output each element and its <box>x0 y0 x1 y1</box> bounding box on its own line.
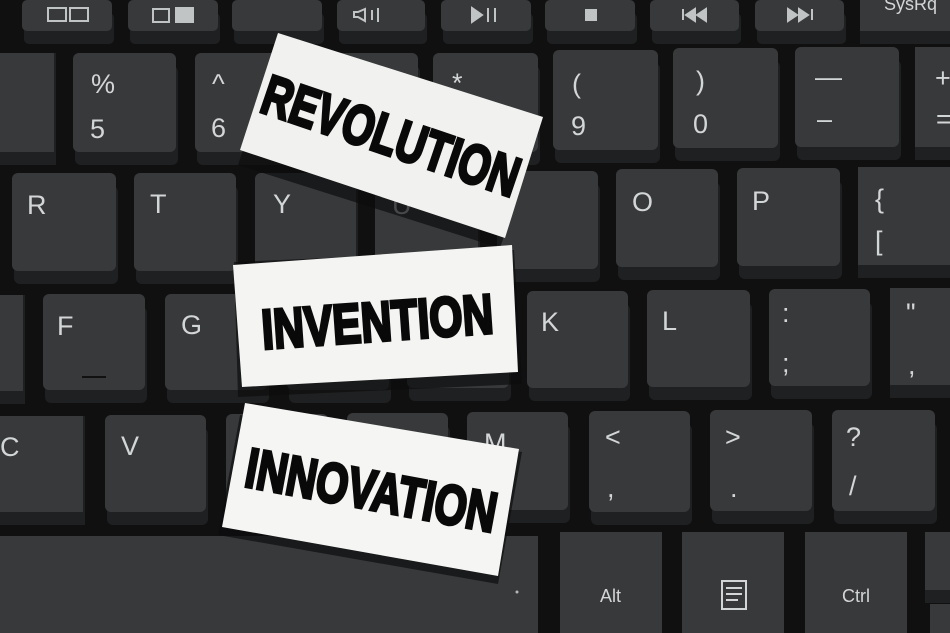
key legends: M <box>484 428 506 458</box>
key legends: 6 <box>211 113 226 143</box>
key legends: ; <box>782 348 790 378</box>
key legends: O <box>632 187 653 217</box>
key legends: < <box>605 422 621 452</box>
block: REVOLUTION <box>240 33 543 238</box>
key legends: { <box>875 184 884 214</box>
key legends: 5 <box>90 114 105 144</box>
key legends: L <box>662 306 677 336</box>
block: INNOVATION <box>222 403 519 576</box>
key legends: 9 <box>571 111 586 141</box>
key legends: F <box>57 311 74 341</box>
key legends: . <box>730 473 738 503</box>
key legends: T <box>150 189 166 219</box>
key legends: V <box>121 431 139 461</box>
block: INVENTION <box>233 245 518 387</box>
key legends: G <box>181 310 202 340</box>
key legends: ) <box>696 66 705 96</box>
key legends: ? <box>846 422 861 452</box>
key legends: — <box>815 62 842 92</box>
key legends: , <box>607 473 615 503</box>
key legends: P <box>752 186 770 216</box>
key legends: ^ <box>212 69 225 99</box>
key legends: : <box>782 298 790 328</box>
key legends: % <box>91 69 115 99</box>
block: REVOLUTION: REVOLUTION <box>254 63 528 209</box>
key legends: C <box>0 432 20 462</box>
key legends: Alt <box>600 586 621 606</box>
key legends: , <box>908 350 916 380</box>
key legends: 0 <box>693 109 708 139</box>
icon: function key symbols <box>48 8 812 22</box>
key legends: / <box>849 471 857 501</box>
block shadow <box>218 45 540 584</box>
key legends: > <box>725 422 741 452</box>
icon: menu key <box>722 581 746 609</box>
key legends: – <box>817 104 832 134</box>
block: INVENTION: INVENTION <box>259 282 495 361</box>
key legends: Ctrl <box>842 586 870 606</box>
key legends: K <box>541 307 559 337</box>
key legends: [ <box>875 226 883 256</box>
key legends: " <box>906 298 916 328</box>
key legends: R <box>27 190 46 220</box>
block: INNOVATION: INNOVATION <box>241 436 502 544</box>
key legends: U <box>392 190 412 220</box>
key legends: Y <box>273 189 291 219</box>
key legends: * <box>452 68 463 98</box>
key legends: ( <box>572 69 581 99</box>
